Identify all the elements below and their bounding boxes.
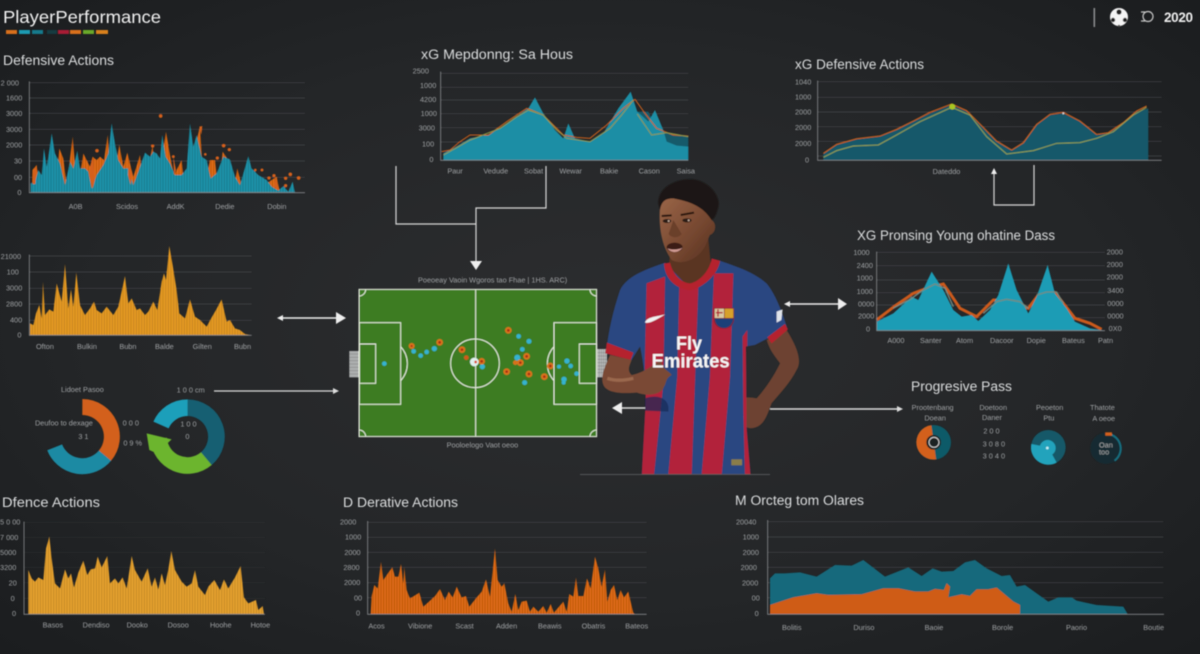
area chart: 4200 <box>420 95 436 104</box>
area chart: 2000 <box>1107 273 1123 282</box>
donut labels: 0 9 % <box>123 439 143 448</box>
panel: orange bar chart: 2800 <box>6 300 22 309</box>
collar <box>664 258 720 291</box>
bar chart: Acos <box>368 622 385 631</box>
area chart: Borole <box>992 623 1013 632</box>
area chart: Dateddo <box>933 167 960 176</box>
area chart: 0 <box>755 609 759 618</box>
sleeve mark <box>777 309 783 323</box>
area chart: 0000 <box>1107 311 1124 320</box>
bar chart: teal and orange bars <box>1 78 305 211</box>
legend labels: Doean <box>924 414 946 423</box>
bar chart: teal and orange bars: 00 <box>14 173 22 182</box>
area chart: 1000 <box>743 533 759 542</box>
legend labels: Oan <box>1099 440 1113 449</box>
panel: pitch map <box>349 276 607 449</box>
bar chart: teal and orange bars: 0 <box>17 188 21 197</box>
jersey sponsor text: Fly <box>676 332 703 353</box>
panel: xG defensive actions chart <box>795 57 1162 176</box>
icon: club crest <box>714 308 734 329</box>
bar chart: 2000 <box>340 518 356 527</box>
area chart: 2000 <box>795 139 811 148</box>
panel: defensive actions chart: Defensive Actions <box>3 53 114 68</box>
icon: football <box>1110 8 1128 27</box>
bar chart: 5 0 00 <box>0 518 20 527</box>
area chart: 1000 <box>857 287 873 296</box>
bar chart: Hotoe <box>251 620 270 629</box>
legend labels: 2 0 0 <box>983 427 1000 436</box>
arrow: donuts to pitch <box>214 388 339 394</box>
header: year and icons <box>1094 8 1193 27</box>
bar chart: 20 <box>9 578 17 587</box>
area chart: 00 <box>752 594 760 603</box>
area chart: 0000 <box>1107 299 1124 308</box>
connector: xG chart return <box>991 165 1034 205</box>
area chart: Cason <box>639 166 660 175</box>
pitch lines <box>359 289 597 437</box>
area chart <box>413 66 696 175</box>
donut labels: 1 0 0 <box>180 420 197 429</box>
bar chart: 7 000 <box>0 533 18 542</box>
panel: orange bar chart <box>1 246 252 351</box>
hair <box>658 179 719 220</box>
area chart: 2000 <box>1107 248 1123 257</box>
panel: xG defensive actions chart: xG Defensive Actions <box>795 57 924 72</box>
bar chart: Basos <box>43 620 63 629</box>
face features <box>662 213 694 216</box>
panel: orcteg area chart: M Orcteg tom Olares <box>735 493 864 508</box>
area chart: 0000 <box>858 300 874 309</box>
area chart: 2000 <box>795 107 811 116</box>
area chart: 0 <box>805 156 809 165</box>
arrow: orange chart to pitch <box>277 312 346 324</box>
panel: progressive pass <box>911 379 1122 465</box>
area chart: Dopie <box>1027 336 1046 345</box>
area chart: Santer <box>920 336 942 345</box>
head <box>658 179 719 262</box>
donut: teal <box>1031 430 1066 465</box>
area chart: 2000 <box>741 563 757 572</box>
orange player markers <box>410 328 553 379</box>
bar chart: 2800 <box>343 563 360 572</box>
icon: ring <box>1141 12 1153 22</box>
bar chart: 0 <box>11 594 15 603</box>
panel: orange bar chart: Balde <box>155 342 174 351</box>
panel: xG pronsing chart: XG Pronsing Young ohatine Dass <box>857 228 1055 243</box>
bar chart: Scast <box>455 622 474 631</box>
area chart: 2400 <box>857 261 873 270</box>
area chart: 2500 <box>413 66 429 75</box>
neck <box>667 238 712 289</box>
bar chart: teal and orange bars: Dobin <box>267 202 286 211</box>
panel: pitch map: Pooloelogo Vaot oeoo <box>447 440 518 449</box>
area chart: 0 <box>429 155 433 164</box>
area chart: Duriso <box>853 623 875 632</box>
bar chart <box>0 518 270 629</box>
area chart: Paur <box>447 166 463 175</box>
area chart: 2000 <box>858 312 874 321</box>
legend labels: A oeoe <box>1092 414 1115 423</box>
area chart: 1000 <box>420 81 436 90</box>
panel: progressive pass: Progresive Pass <box>911 379 1012 394</box>
area chart: 2000 <box>743 548 759 557</box>
bar chart: 0 <box>356 609 360 618</box>
area chart: Saisa <box>677 166 696 175</box>
panel: xG mepdonng chart <box>413 47 696 175</box>
area chart: 2000 <box>742 578 758 587</box>
area chart: 3400 <box>1107 286 1124 295</box>
area chart: Paorio <box>1066 623 1087 632</box>
area chart <box>795 77 1162 176</box>
panel: orange bar chart: Ofton <box>36 342 54 351</box>
baseline under player <box>580 474 770 475</box>
bar chart: 5000 <box>0 548 16 557</box>
legend labels: Prootenbang <box>912 403 954 412</box>
bar chart: 2000 <box>344 578 360 587</box>
connector: top charts to pitch <box>396 166 546 270</box>
donut labels: 3 1 <box>78 432 89 441</box>
donut labels: Deufoo to dexage <box>35 418 93 427</box>
panel: orange bar chart: 21000 <box>1 252 21 261</box>
bar chart: 1000 <box>345 533 361 542</box>
panel: orange bar chart: 100 <box>7 268 19 277</box>
area chart: 20040 <box>736 518 756 527</box>
icon: left goal <box>349 351 359 377</box>
panel: orange bar chart: Bubn <box>234 342 251 351</box>
donut labels: Lidoet Pasoo <box>61 385 104 394</box>
arrow: progressive pass to pitch <box>612 402 903 414</box>
area chart: 2000 <box>795 123 811 132</box>
title colour bar <box>6 30 108 34</box>
panel: orange bar chart: 0 <box>17 330 21 339</box>
icon: right goal <box>597 349 607 377</box>
panel: orange bar chart: Gilten <box>193 342 212 351</box>
area chart: Bolitis <box>782 623 802 632</box>
pitch surface <box>359 289 597 437</box>
legend labels: Daner <box>982 413 1003 422</box>
bar chart: Obatris <box>582 622 606 631</box>
area chart: Vedude <box>483 166 508 175</box>
area chart: 1000 <box>421 109 437 118</box>
panel: derative actions chart: D Derative Actions <box>343 495 458 510</box>
panel: xG pronsing chart <box>853 228 1124 345</box>
bar chart: teal and orange bars: 2 000 <box>1 78 19 87</box>
legend labels: 3 0 4 0 <box>983 451 1005 460</box>
area chart <box>853 248 1124 345</box>
area chart: Bakie <box>600 166 618 175</box>
bar chart: teal and orange bars: 30 <box>14 157 22 166</box>
bar chart: 00 <box>354 593 362 602</box>
panel: xG mepdonng chart: xG Mepdonng: Sa Hous <box>421 47 573 62</box>
bar chart: teal and orange bars: 2000 <box>6 141 22 150</box>
panel: orange bar chart: 3000 <box>6 284 22 293</box>
donut labels: 0 0 0 <box>123 419 139 428</box>
donut: orange and teal <box>55 407 112 466</box>
area chart: Sobat <box>524 166 543 175</box>
panel: orcteg area chart <box>735 493 1164 632</box>
area chart: Boutie <box>1143 623 1164 632</box>
area chart: 100 <box>422 140 434 149</box>
panel: orange bar chart: Bulkin <box>77 342 97 351</box>
area chart: 1000 <box>853 248 870 257</box>
icon: green arrow tip <box>147 433 172 453</box>
ball marker <box>464 355 479 366</box>
bar chart: teal and orange bars: A0B <box>69 202 83 211</box>
area chart: Patn <box>1098 336 1113 345</box>
bar chart: Dosoo <box>168 620 189 629</box>
donut: teal and green <box>159 408 216 466</box>
header: title: PlayerPerformance <box>3 7 161 27</box>
bar chart: teal and orange bars: AddK <box>167 202 185 211</box>
bar chart: teal and orange bars: 3000 <box>6 125 22 134</box>
panel: offence actions chart <box>0 495 270 629</box>
donut labels: 0 <box>185 432 189 441</box>
bar chart <box>340 518 648 631</box>
panel: derative actions chart <box>340 495 648 631</box>
bar chart: teal and orange bars: 3000 <box>6 109 22 118</box>
sleeve cuffs <box>605 343 633 360</box>
area chart: Dacoor <box>990 336 1014 345</box>
area chart: 0X0 <box>1109 324 1122 333</box>
bar chart: Dooko <box>127 620 148 629</box>
bar chart: 0 <box>12 609 16 618</box>
bar chart: 3200 <box>0 563 16 572</box>
bar chart: teal and orange bars: Dedie <box>215 202 234 211</box>
donut: dark gauge <box>1090 432 1122 464</box>
donut: orange and teal <box>914 425 951 462</box>
jersey tag <box>731 459 742 465</box>
area chart: 0 <box>866 325 870 334</box>
bar chart: 2000 <box>344 548 361 557</box>
area chart: 3000 <box>419 123 435 132</box>
bar chart: Dendiso <box>83 620 110 629</box>
area chart: Wewar <box>559 166 583 175</box>
footballer figure <box>602 179 799 475</box>
player left arm and hand <box>602 355 672 395</box>
legend labels: Doetoon <box>979 403 1007 412</box>
footballer figure: Emirates <box>652 351 730 372</box>
panel: offence actions chart: Dfence Actions <box>2 495 100 510</box>
area chart: Atom <box>956 336 973 345</box>
bar chart: Adden <box>496 622 517 631</box>
bar chart: teal and orange bars: Scidos <box>116 202 138 211</box>
area chart <box>736 518 1164 632</box>
area chart: A000 <box>887 336 904 345</box>
area chart: 1000 <box>795 92 811 101</box>
area chart: 1000 <box>857 274 873 283</box>
jersey <box>605 258 788 475</box>
area chart: 1040 <box>795 77 811 86</box>
donut labels: 1 0 0 cm <box>177 386 205 395</box>
panel: orange bar chart: Bubn <box>119 342 136 351</box>
panel: defensive actions chart <box>1 53 305 211</box>
bar chart: Hoohe <box>210 620 232 629</box>
icon: swoosh <box>645 314 665 323</box>
legend labels: too <box>1099 448 1109 457</box>
bar chart: Beawis <box>538 622 562 631</box>
player right arm <box>732 330 799 428</box>
teal player markers <box>382 334 579 385</box>
legend labels: Peoeton <box>1036 403 1063 412</box>
area chart: Baoie <box>925 623 943 632</box>
legend labels: Ptu <box>1043 413 1054 422</box>
panel: pie charts left <box>35 385 216 466</box>
arrow: player to right chart <box>784 298 847 310</box>
legend labels: 3 0 8 0 <box>983 439 1005 448</box>
bar chart: teal and orange bars: 1600 <box>6 94 22 103</box>
bar chart: Vibione <box>408 622 432 631</box>
area chart: Bateus <box>1062 336 1085 345</box>
legend labels: Thatote <box>1090 403 1115 412</box>
panel: pitch map: Poeoeay Vaoin Wgoros tao Fhae | 1HS. ARC) <box>418 276 567 285</box>
panel: orange bar chart: 400 <box>10 316 22 325</box>
bar chart: Bateos <box>625 622 648 631</box>
area chart: 2000 <box>1107 260 1123 269</box>
header: year and icons: 2020 <box>1164 10 1193 25</box>
